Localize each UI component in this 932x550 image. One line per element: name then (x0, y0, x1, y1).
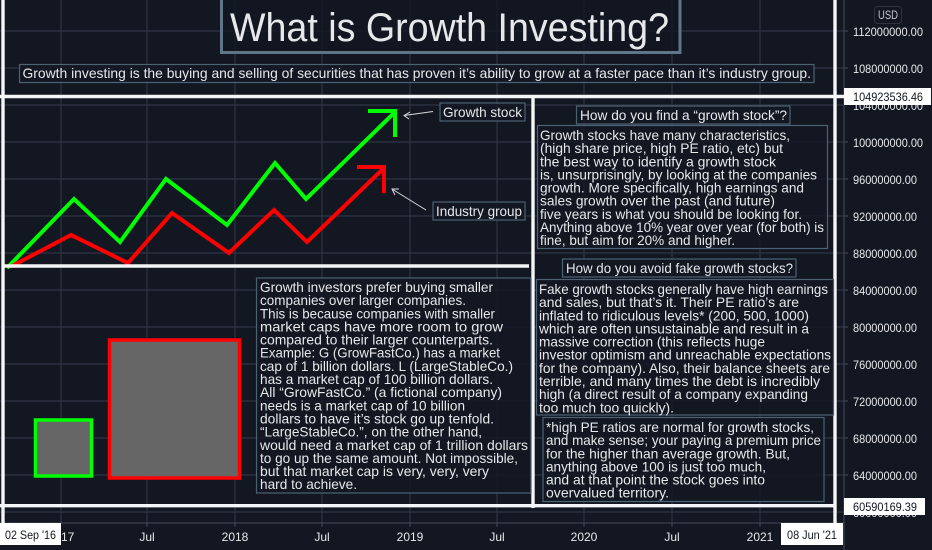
text block: small vs large companies: cap of 1 billion dollars. L (LargeStableCo.) (260, 358, 513, 374)
date tag: start: 02 Sep '16 (5, 528, 56, 542)
line chart: growth vs industry (7, 111, 395, 268)
text block: PE ratio footnote: overvalued territory. (546, 485, 669, 501)
text block: finding growth stocks: growth. More specifically, high earnings and (540, 180, 804, 196)
text block: fake growth stocks: which are often unsustainable and result in a (538, 320, 809, 336)
text block: finding growth stocks (538, 126, 828, 248)
time axis: 2018 (222, 530, 249, 544)
text block: finding growth stocks: Anything above 10% year over year (for both) is (540, 219, 824, 235)
text block: finding growth stocks: (high share price, high PE ratio, etc) but (540, 140, 783, 156)
time axis: Jul (664, 530, 680, 544)
text block: PE ratio footnote: anything above 100 is just too much, (546, 458, 766, 474)
price axis: 80000000.00 (853, 321, 917, 335)
price axis: 96000000.00 (853, 173, 917, 187)
text block: small vs large companies: “LargeStableCo.”, on the other hand, (260, 424, 482, 440)
heading: how to find a growth stock: How do you find a “growth stock”? (580, 107, 787, 123)
text block: finding growth stocks: Growth stocks have many characteristics, (540, 127, 790, 143)
currency badge: USD (874, 6, 902, 24)
square: small company (36, 420, 92, 476)
price axis: 72000000.00 (853, 395, 917, 409)
currency badge: USD: USD (878, 8, 898, 22)
price axis: 92000000.00 (853, 210, 917, 224)
text block: fake growth stocks: terrible, and many times the debt is incredibly (539, 373, 820, 389)
text block: fake growth stocks: too much too quickly). (539, 399, 674, 415)
text block: finding growth stocks: five years is what you should be looking for. (540, 206, 802, 222)
text block: small vs large companies (256, 278, 531, 493)
time axis: Jul (489, 530, 505, 544)
time axis: Jul (314, 530, 330, 544)
label: industry group: Industry group (436, 203, 522, 219)
text block: small vs large companies: to go up the same amount. Not impossible, (260, 450, 518, 466)
price tag: bottom level: 60590169.39 (853, 500, 917, 514)
text block: small vs large companies: This is because companies with smaller (260, 305, 495, 321)
text block: small vs large companies: compared to their larger counterparts. (260, 332, 493, 348)
price axis: 100000000.00 (853, 136, 923, 150)
arrow: to growth stock line (404, 112, 433, 119)
price axis: 68000000.00 (853, 432, 917, 446)
arrow: to industry group line (392, 189, 426, 210)
text block: small vs large companies: All “GrowFastCo.” (a fictional company) (260, 384, 502, 400)
text block: small vs large companies: but that market cap is very, very, very (260, 463, 489, 479)
heading: how to avoid fake growth stocks: How do you avoid fake growth stocks? (566, 260, 793, 276)
text block: small vs large companies: needs is a market cap of 10 billion (260, 397, 465, 413)
text block: PE ratio footnote (543, 418, 824, 502)
label: growth stock: Growth stock (443, 104, 523, 120)
text block: PE ratio footnote: and at that point the stock goes into (546, 472, 765, 488)
green growth stock line (7, 111, 395, 268)
price axis: 88000000.00 (853, 247, 917, 261)
time axis: 2019 (397, 530, 424, 544)
text block: finding growth stocks: fine, but aim for 20% and higher. (540, 232, 735, 248)
text block: finding growth stocks: is, unsurprisingly, by looking at the companies (540, 166, 817, 182)
text block: fake growth stocks (536, 280, 834, 415)
text block: PE ratio footnote: and make sense; your paying a premium price (546, 432, 821, 448)
text block: small vs large companies: market caps have more room to grow (260, 318, 504, 334)
date tag: start (0, 523, 61, 545)
price axis: 64000000.00 (853, 469, 917, 483)
red industry group line (10, 167, 384, 267)
text block: PE ratio footnote: *high PE ratios are normal for growth stocks, (546, 419, 814, 435)
text block: fake growth stocks: investor optimism and unreachable expectations (539, 347, 831, 363)
date tag: end: 08 Jun '21 (787, 528, 837, 542)
text block: fake growth stocks: and sales, but that’s it. Their PE ratio’s are (539, 294, 799, 310)
text block: small vs large companies: Example: G (GrowFastCo.) has a market (260, 345, 500, 361)
text block: small vs large companies: Growth investors prefer buying smaller (260, 279, 493, 295)
text block: finding growth stocks: the best way to identify a growth stock (540, 153, 777, 169)
price tag: top level: 104923536.46 (853, 90, 923, 104)
time axis: Jul (139, 530, 155, 544)
text block: fake growth stocks: Fake growth stocks generally have high earnings (539, 281, 828, 297)
price axis (844, 6, 931, 520)
text block: small vs large companies: dollars to have it’s stock go up tenfold. (260, 410, 494, 426)
time axis: 2020 (571, 530, 598, 544)
price axis: 108000000.00 (853, 62, 923, 76)
text block: fake growth stocks: inflated to ridiculous levels* (200, 500, 1000) (539, 307, 809, 323)
price axis: 76000000.00 (853, 358, 917, 372)
text block: small vs large companies: companies over larger companies. (260, 292, 466, 308)
price axis: 112000000.00 (853, 25, 923, 39)
text block: fake growth stocks: massive correction (this reflects huge (539, 334, 765, 350)
time axis: 2017 (48, 530, 75, 544)
text block: small vs large companies: hard to achieve. (260, 476, 357, 492)
text block: fake growth stocks: for the company). Also, their balance sheets are (539, 360, 830, 376)
date tag: end (781, 523, 843, 545)
price axis: 84000000.00 (853, 284, 917, 298)
subtitle: definition: Growth investing is the buying and selling of securities that has proven it’s ability to grow at a faster pace than it’s industry group. (22, 65, 811, 81)
price axis: 104000000.00 (853, 99, 923, 113)
text block: PE ratio footnote: for the higher than average growth. But, (546, 445, 790, 461)
text block: finding growth stocks: sales growth over the past (and future) (540, 193, 775, 209)
text block: fake growth stocks: high (a direct result of a company expanding (539, 386, 808, 402)
price axis: 60000000.00 (853, 506, 917, 520)
time axis: 2021 (747, 530, 774, 544)
time axis (0, 523, 843, 545)
title: What is Growth Investing? (230, 6, 669, 50)
square: large company (110, 340, 240, 478)
text block: small vs large companies: has a market cap of 100 billion dollars. (260, 371, 493, 387)
text block: small vs large companies: would need a market cap of 1 trillion dollars (259, 437, 528, 453)
